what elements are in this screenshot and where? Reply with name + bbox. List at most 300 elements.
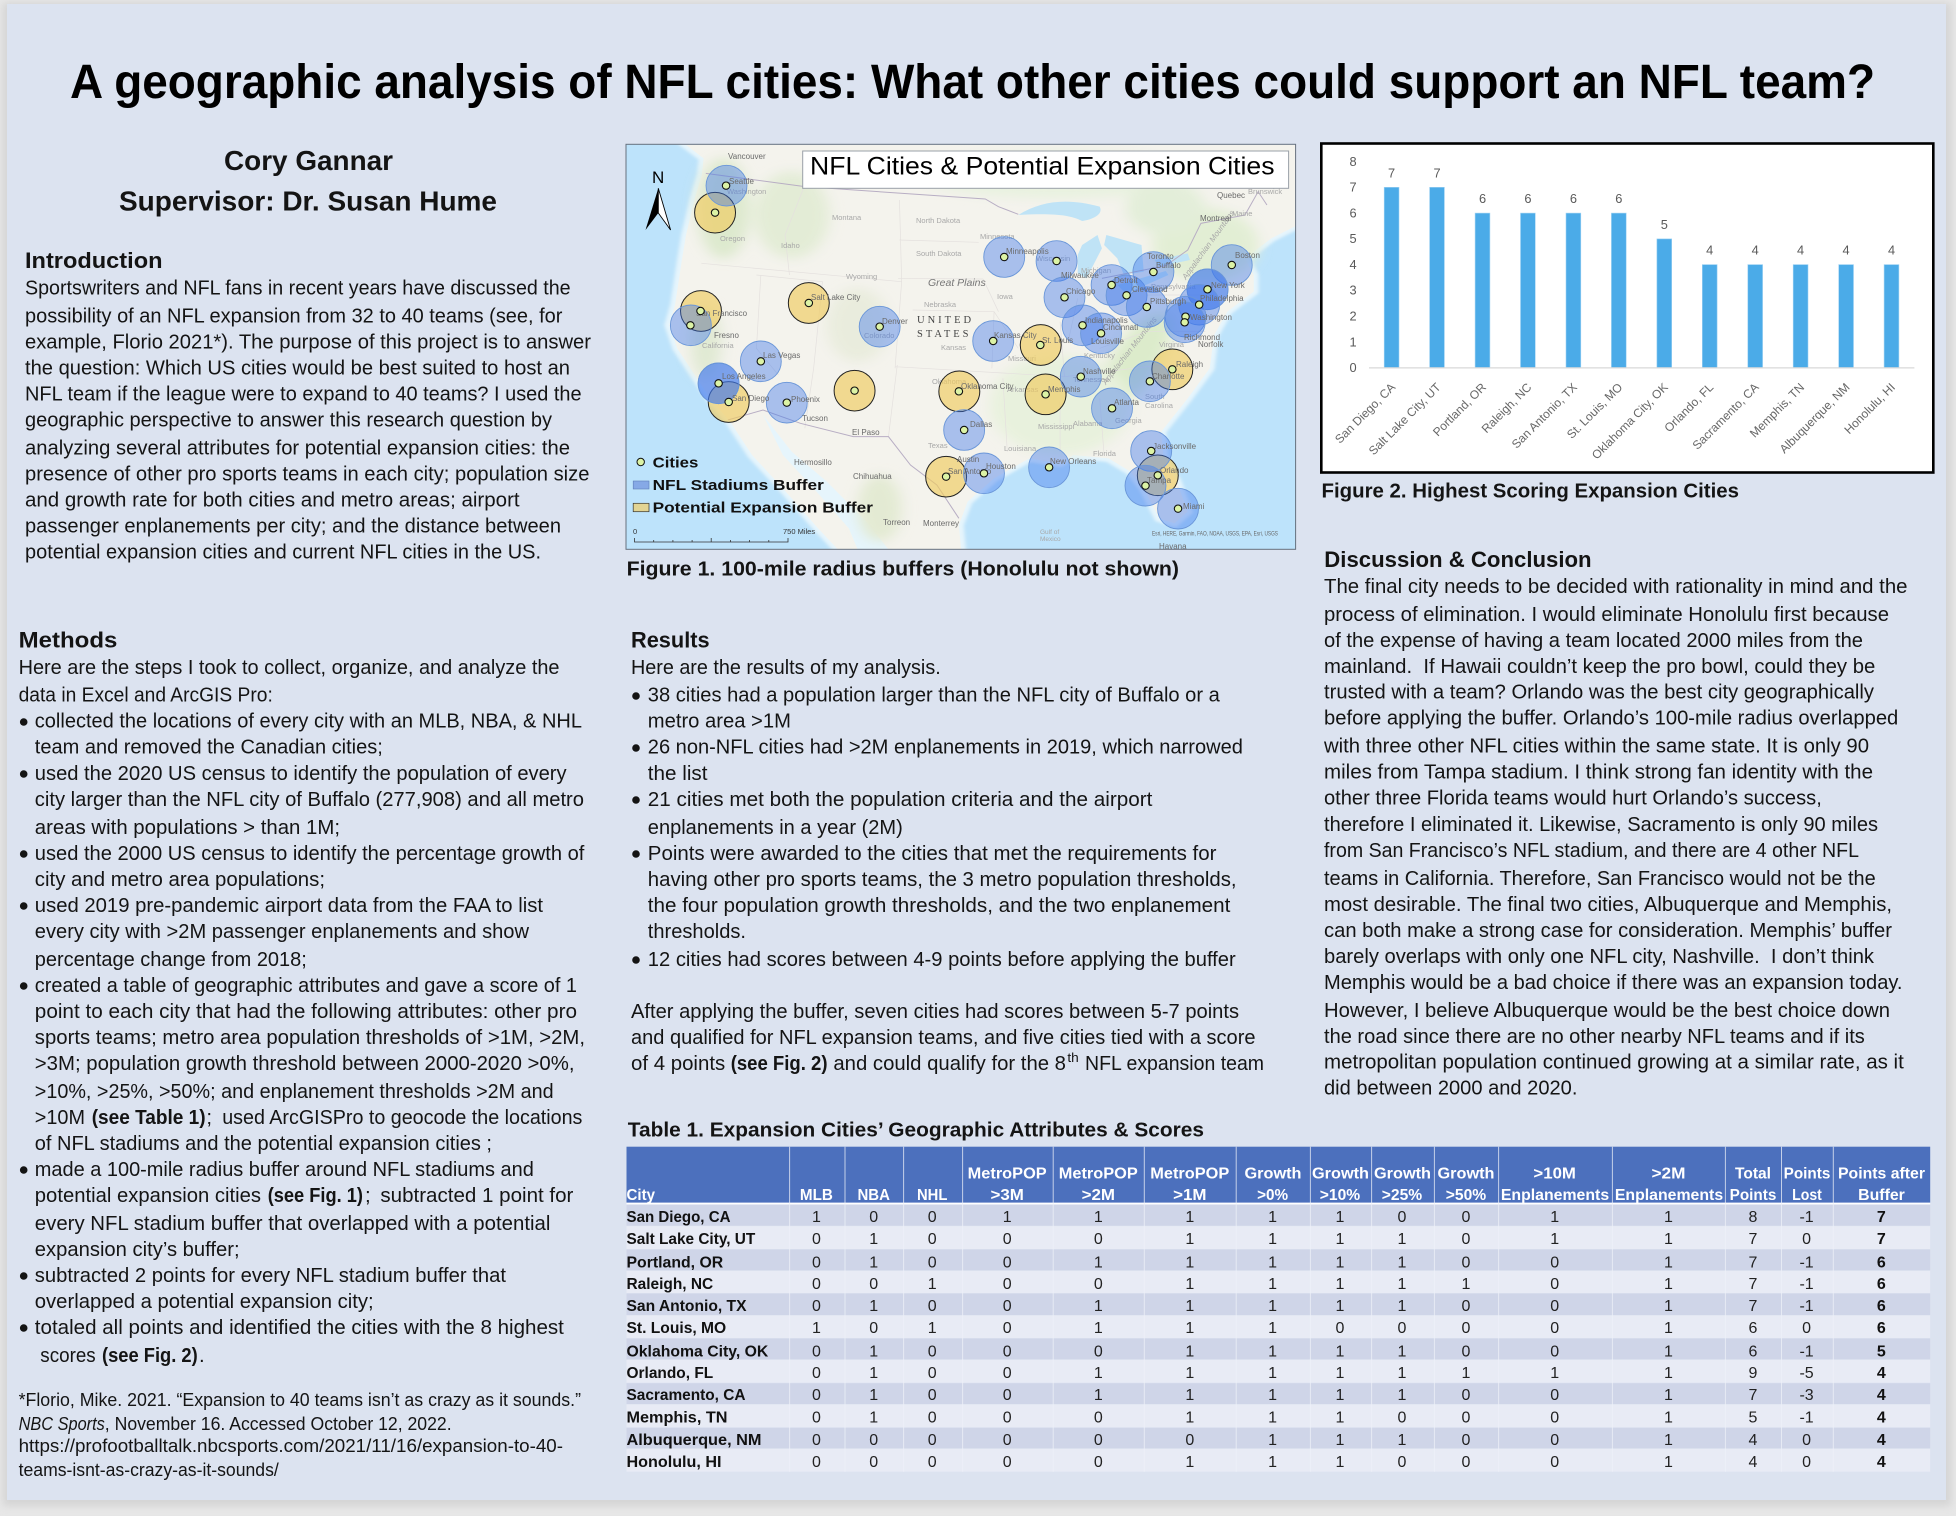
y axis labels: 1 bbox=[1349, 334, 1357, 349]
table city names: Raleigh, NC bbox=[626, 1276, 713, 1293]
city labels: Salt Lake City bbox=[811, 293, 860, 302]
table values: 1 bbox=[1268, 1410, 1277, 1427]
table values: 6 bbox=[1749, 1320, 1758, 1337]
y axis labels: 3 bbox=[1349, 283, 1357, 298]
heading: discussion and conclusion: Discussion & Conclusion bbox=[1324, 547, 1592, 572]
bar value labels: 6 bbox=[1570, 191, 1577, 206]
table values: 1 bbox=[1664, 1320, 1673, 1337]
table values: 1 bbox=[1398, 1254, 1407, 1271]
y axis labels: 4 bbox=[1349, 257, 1357, 272]
bullet list: methods steps: of NFL stadiums and the potential expansion cities ; bbox=[35, 1133, 492, 1155]
author and supervisor: Supervisor: Dr. Susan Hume bbox=[119, 186, 497, 216]
table values: 0 bbox=[1003, 1320, 1012, 1337]
table values: 6 bbox=[1877, 1320, 1886, 1337]
x axis city labels: Albuquerque, NM bbox=[1777, 380, 1853, 456]
text block: discussion body: mainland. If Hawaii couldn’t keep the pro bowl, could they be bbox=[1324, 656, 1875, 678]
table values: 0 bbox=[1398, 1209, 1407, 1226]
city labels: Oklahoma City bbox=[961, 382, 1013, 391]
table values: 1 bbox=[1268, 1454, 1277, 1471]
table values: 9 bbox=[1749, 1365, 1758, 1382]
map labels: states and regions: Appalachian Mountains bbox=[1100, 315, 1159, 387]
table values: 1 bbox=[1268, 1320, 1277, 1337]
text block: methods intro: Here are the steps I took to collect, organize, and analyze the bbox=[19, 657, 560, 679]
potential expansion buffers bbox=[681, 192, 1193, 497]
city labels: Tucson bbox=[802, 414, 828, 423]
table values: 1 bbox=[1185, 1231, 1194, 1248]
table values: 1 bbox=[1664, 1231, 1673, 1248]
map labels: states and regions: Oklahoma bbox=[932, 377, 967, 386]
bullet list: results: having other pro sports teams, the 3 metro population thresholds, bbox=[648, 869, 1237, 891]
text block: results conclusion: and qualified for NFL expansion teams, and five cities tied with a score bbox=[631, 1027, 1256, 1049]
map labels: states and regions: Iowa bbox=[997, 292, 1014, 301]
city labels: Cleveland bbox=[1132, 285, 1168, 294]
city labels: El Paso bbox=[852, 428, 880, 437]
table header: Lost bbox=[1792, 1187, 1822, 1204]
text block: results conclusion: NFL expansion team bbox=[1085, 1053, 1264, 1075]
table values: 1 bbox=[869, 1231, 878, 1248]
city labels: Raleigh bbox=[1176, 360, 1203, 369]
table city names: San Diego, CA bbox=[626, 1209, 730, 1226]
caption: figure 1: Figure 1. 100-mile radius buffers (Honolulu not shown) bbox=[627, 558, 1179, 581]
table values: 7 bbox=[1877, 1209, 1886, 1226]
table values: 0 bbox=[928, 1365, 937, 1382]
table values: 1 bbox=[1268, 1276, 1277, 1293]
text block: results conclusion: After applying the buffer, seven cities had scores between 5-7 points bbox=[631, 1001, 1239, 1023]
table values: 1 bbox=[1268, 1209, 1277, 1226]
table city names: Portland, OR bbox=[626, 1254, 723, 1271]
map labels: states and regions: Alabama bbox=[1073, 419, 1103, 428]
map labels: states and regions: Texas bbox=[928, 441, 948, 450]
table values: 1 bbox=[1398, 1387, 1407, 1404]
map labels: states and regions: Idaho bbox=[781, 241, 800, 250]
footnote: citation: *Florio, Mike. 2021. “Expansion to 40 teams isn’t as crazy as it sounds.” bbox=[19, 1390, 581, 1410]
table header: Growth bbox=[1374, 1165, 1431, 1182]
bullet list: results: enplanements in a year (2M) bbox=[648, 817, 903, 839]
table values: 0 bbox=[1003, 1254, 1012, 1271]
table values: 1 bbox=[928, 1320, 937, 1337]
bullet list: methods steps: overlapped a potential expansion city; bbox=[35, 1291, 374, 1313]
y axis labels: 8 bbox=[1349, 154, 1357, 169]
footnote: citation: teams-isnt-as-crazy-as-it-sounds/ bbox=[19, 1460, 280, 1480]
table header: >0% bbox=[1257, 1187, 1288, 1204]
table values: 1 bbox=[1185, 1343, 1194, 1360]
table values: 0 bbox=[1550, 1298, 1559, 1315]
x axis city labels: Honolulu, HI bbox=[1841, 380, 1898, 437]
city labels: Indianapolis bbox=[1085, 316, 1128, 325]
text block: introduction body: potential expansion cities and current NFL cities in the US. bbox=[25, 542, 541, 564]
text block: introduction body: Sportswriters and NFL fans in recent years have discussed the bbox=[25, 278, 571, 300]
map label: Great Plains and United States: STATES bbox=[917, 329, 972, 340]
table values: 0 bbox=[812, 1343, 821, 1360]
bullet list: methods steps: used ArcGISPro to geocode the locations bbox=[222, 1107, 582, 1129]
heading: methods: Methods bbox=[19, 628, 117, 653]
table values: 0 bbox=[1550, 1432, 1559, 1449]
table values: 0 bbox=[1398, 1320, 1407, 1337]
city labels: Hermosillo bbox=[794, 458, 832, 467]
bar value labels: 4 bbox=[1843, 243, 1850, 258]
bullet list: methods steps: collected the locations of every city with an MLB, NBA, & NHL bbox=[35, 711, 582, 733]
table values: -1 bbox=[1799, 1343, 1814, 1360]
text block: introduction body: presence of other pro sports teams in each city; population size bbox=[25, 464, 589, 486]
table values: 1 bbox=[1268, 1231, 1277, 1248]
table values: 0 bbox=[1550, 1343, 1559, 1360]
bullet list: methods steps: ; bbox=[206, 1107, 212, 1129]
map legend: Potential Expansion Buffer bbox=[653, 500, 873, 517]
bar value labels bbox=[1388, 165, 1895, 258]
text block: introduction body: geographic perspective to answer this research question by bbox=[25, 410, 553, 432]
table values: 0 bbox=[928, 1343, 937, 1360]
city labels: Kansas City bbox=[994, 331, 1037, 340]
bullet list: results: 26 non-NFL cities had >2M enplanements in 2019, which narrowed bbox=[648, 737, 1243, 759]
city labels: Vancouver bbox=[728, 152, 766, 161]
bullet list: results: the four population growth thresholds, and the two enplanement bbox=[648, 895, 1231, 917]
city labels: Richmond bbox=[1184, 333, 1220, 342]
bullet list: results: thresholds. bbox=[648, 921, 746, 943]
map labels: states and regions: Appalachian Mountains bbox=[1180, 209, 1237, 282]
city labels: Torreon bbox=[883, 518, 910, 527]
table values: 0 bbox=[812, 1387, 821, 1404]
table values: -1 bbox=[1799, 1276, 1814, 1293]
bar value labels: 4 bbox=[1752, 243, 1759, 258]
city labels: Chihuahua bbox=[853, 472, 892, 481]
table values: 0 bbox=[1550, 1410, 1559, 1427]
table values: 1 bbox=[869, 1410, 878, 1427]
table row backgrounds bbox=[626, 1204, 1930, 1472]
footnote: citation: https://profootballtalk.nbcsports.com/2021/11/16/expansion-to-40- bbox=[19, 1436, 563, 1456]
table values: 1 bbox=[1336, 1365, 1345, 1382]
map labels: states and regions: Wyoming bbox=[846, 272, 877, 281]
map labels: states and regions: South bbox=[1145, 392, 1165, 401]
bullet list: methods steps: expansion city’s buffer; bbox=[35, 1239, 240, 1261]
table values: 0 bbox=[869, 1209, 878, 1226]
table city names: San Antonio, TX bbox=[626, 1298, 747, 1315]
map labels: states and regions: Mexico bbox=[1040, 536, 1061, 543]
panel: methods bbox=[19, 628, 585, 1367]
table header: >3M bbox=[990, 1187, 1024, 1204]
table values: 0 bbox=[812, 1432, 821, 1449]
bullet list: results: Points were awarded to the cities that met the requirements for bbox=[648, 843, 1217, 865]
city labels: Austin bbox=[957, 455, 979, 464]
table values: 0 bbox=[1398, 1454, 1407, 1471]
city labels: Houston bbox=[986, 462, 1016, 471]
bullet list: methods steps: totaled all points and identified the cities with the 8 highest bbox=[35, 1317, 564, 1339]
text block: discussion body: did between 2000 and 2020. bbox=[1324, 1078, 1577, 1100]
table city names bbox=[626, 1209, 768, 1471]
bullet list: methods steps: subtracted 2 points for every NFL stadium buffer that bbox=[35, 1265, 506, 1287]
table values: 0 bbox=[1003, 1276, 1012, 1293]
table values: 1 bbox=[1398, 1298, 1407, 1315]
bar value labels: 4 bbox=[1888, 243, 1895, 258]
map labels: states and regions: Gulf of bbox=[1040, 529, 1059, 536]
table values: 0 bbox=[1461, 1343, 1470, 1360]
panel: introduction bbox=[25, 248, 591, 564]
bullet list: methods steps: city larger than the NFL city of Buffalo (277,908) and all metro bbox=[35, 789, 584, 811]
table values: 1 bbox=[1461, 1276, 1470, 1293]
text block: discussion body: The final city needs to be decided with rationality in mind and the bbox=[1324, 576, 1908, 598]
table header: MetroPOP bbox=[968, 1165, 1047, 1182]
table values: 7 bbox=[1749, 1254, 1758, 1271]
table values: 1 bbox=[1336, 1254, 1345, 1271]
map legend: NFL Stadiums Buffer bbox=[653, 477, 824, 494]
x axis city labels: San Diego, CA bbox=[1332, 380, 1398, 446]
table values: 0 bbox=[869, 1454, 878, 1471]
table values: 5 bbox=[1877, 1343, 1886, 1360]
table values: 7 bbox=[1749, 1387, 1758, 1404]
city labels: New York bbox=[1211, 281, 1246, 290]
table header: Points after bbox=[1838, 1165, 1925, 1182]
table values bbox=[812, 1209, 1886, 1471]
table values: 0 bbox=[812, 1410, 821, 1427]
x axis city labels bbox=[1332, 380, 1898, 462]
text block: discussion body: teams in California. Therefore, San Francisco would not be the bbox=[1324, 868, 1876, 890]
y axis labels: 2 bbox=[1349, 308, 1357, 324]
table values: 1 bbox=[1185, 1365, 1194, 1382]
bullet list: methods steps: . bbox=[199, 1345, 205, 1367]
text block: introduction body: example, Florio 2021*). The purpose of this project is to answer bbox=[25, 331, 591, 353]
map title box bbox=[803, 151, 1289, 188]
table city names: Albuquerque, NM bbox=[626, 1432, 762, 1449]
table values: 1 bbox=[1094, 1365, 1103, 1382]
table header: Buffer bbox=[1858, 1187, 1905, 1204]
table values: 1 bbox=[869, 1387, 878, 1404]
table values: 4 bbox=[1877, 1387, 1886, 1404]
table values: 1 bbox=[1094, 1387, 1103, 1404]
text block: discussion body: metropolitan population continued growing at a similar rate, as it bbox=[1324, 1052, 1904, 1074]
table values: 0 bbox=[812, 1276, 821, 1293]
table values: 1 bbox=[1336, 1209, 1345, 1226]
table values: 1 bbox=[1268, 1254, 1277, 1271]
table values: 0 bbox=[1398, 1410, 1407, 1427]
table values: 1 bbox=[1268, 1343, 1277, 1360]
table values: 1 bbox=[1336, 1276, 1345, 1293]
panel: results bbox=[631, 628, 1264, 1075]
table header: >10M bbox=[1533, 1165, 1576, 1182]
city labels: Fresno bbox=[714, 331, 739, 340]
city labels bbox=[696, 152, 1260, 551]
city labels: Dallas bbox=[970, 420, 992, 429]
table values: 0 bbox=[1802, 1454, 1811, 1471]
table values: -3 bbox=[1799, 1387, 1814, 1404]
table header: Points bbox=[1730, 1187, 1776, 1204]
table values: 1 bbox=[1268, 1432, 1277, 1449]
author and supervisor: Cory Gannar bbox=[224, 145, 393, 176]
city labels: Phoenix bbox=[791, 395, 820, 404]
table values: 0 bbox=[928, 1432, 937, 1449]
table values: 0 bbox=[928, 1454, 937, 1471]
table values: 0 bbox=[1550, 1320, 1559, 1337]
table header: >2M bbox=[1652, 1165, 1686, 1182]
text block: discussion body: miles from Tampa stadium. I think strong fan identity with the bbox=[1324, 762, 1873, 784]
map labels: states and regions: California bbox=[702, 341, 735, 350]
city labels: Memphis bbox=[1048, 385, 1080, 394]
bullet list: results: metro area >1M bbox=[648, 711, 791, 733]
y axis labels: 0 bbox=[1349, 360, 1357, 375]
table values: 0 bbox=[812, 1254, 821, 1271]
table values: 0 bbox=[1550, 1454, 1559, 1471]
text block: methods intro bbox=[19, 657, 560, 707]
map labels: states and regions: Virginia bbox=[1159, 340, 1185, 349]
table values: 1 bbox=[1268, 1387, 1277, 1404]
map labels: states and regions: Minnesota bbox=[980, 232, 1015, 241]
city labels: Philadelphia bbox=[1200, 294, 1244, 303]
city labels: Denver bbox=[882, 317, 908, 326]
text block: methods intro: data in Excel and ArcGIS Pro: bbox=[19, 685, 273, 707]
table values: 0 bbox=[812, 1231, 821, 1248]
table values: 0 bbox=[1094, 1432, 1103, 1449]
table values: 0 bbox=[869, 1276, 878, 1293]
bullet list: methods steps: scores bbox=[40, 1345, 96, 1367]
table values: 1 bbox=[1550, 1231, 1559, 1248]
icon: north arrow: N bbox=[652, 168, 664, 187]
bullet list: methods steps: >10M bbox=[35, 1107, 85, 1129]
table values: -1 bbox=[1799, 1298, 1814, 1315]
city labels: Buffalo bbox=[1156, 261, 1181, 270]
bullet list: methods steps: every NFL stadium buffer that overlapped with a potential bbox=[35, 1213, 550, 1235]
city labels: San Diego bbox=[732, 394, 770, 403]
city labels: Tampa bbox=[1147, 476, 1172, 485]
x axis city labels: Portland, OR bbox=[1430, 380, 1489, 439]
table values: 1 bbox=[1664, 1254, 1673, 1271]
city labels: Havana bbox=[1159, 542, 1187, 551]
table header: City bbox=[627, 1187, 655, 1204]
text block: results intro: Here are the results of my analysis. bbox=[631, 657, 941, 679]
NFL stadium buffers bbox=[670, 165, 1252, 529]
map labels: states and regions: Carolina bbox=[1145, 401, 1174, 410]
table values: 1 bbox=[1398, 1432, 1407, 1449]
map labels: states and regions: Pennsylvania bbox=[1151, 282, 1196, 291]
text block: discussion body: can both make a strong case for consideration. Memphis’ buffer bbox=[1324, 920, 1892, 942]
table header bbox=[626, 1147, 1930, 1204]
table values: 0 bbox=[1461, 1254, 1470, 1271]
table header: Total bbox=[1735, 1165, 1771, 1182]
table values: 0 bbox=[1003, 1432, 1012, 1449]
x axis city labels: Sacramento, CA bbox=[1690, 380, 1762, 452]
table values: 1 bbox=[1094, 1320, 1103, 1337]
text block: introduction body: NFL team if the league were to expand to 40 teams? I used the bbox=[25, 383, 582, 405]
table values: 0 bbox=[1094, 1454, 1103, 1471]
text block: results conclusion: of 4 points bbox=[631, 1053, 725, 1075]
bullet list: results: 21 cities met both the population criteria and the airport bbox=[648, 789, 1153, 811]
table header: Points bbox=[1784, 1165, 1830, 1182]
table values: 4 bbox=[1877, 1454, 1886, 1471]
y axis labels: 6 bbox=[1349, 205, 1357, 220]
table values: 4 bbox=[1749, 1432, 1758, 1449]
bar value labels: 4 bbox=[1797, 243, 1804, 258]
table header: Growth bbox=[1312, 1165, 1369, 1182]
table values: 1 bbox=[1185, 1454, 1194, 1471]
x axis city labels: Raleigh, NC bbox=[1479, 380, 1535, 436]
city labels: St. Louis bbox=[1042, 336, 1073, 345]
text block: results conclusion: (see Fig. 2) bbox=[731, 1053, 828, 1075]
text block: discussion body: most desirable. The final two cities, Albuquerque and Memphis, bbox=[1324, 894, 1892, 916]
map labels: states and regions: Tennessee bbox=[1073, 375, 1109, 384]
table values: 1 bbox=[812, 1209, 821, 1226]
table values: 0 bbox=[1003, 1365, 1012, 1382]
table values: 0 bbox=[928, 1410, 937, 1427]
table values: 1 bbox=[1336, 1298, 1345, 1315]
city labels: Detroit bbox=[1114, 276, 1138, 285]
table values: 0 bbox=[812, 1298, 821, 1315]
table city names: Oklahoma City, OK bbox=[626, 1343, 768, 1360]
map labels: states and regions: Washington bbox=[727, 187, 766, 196]
text block: introduction body bbox=[25, 278, 591, 564]
bullet list: methods steps: (see Fig. 2) bbox=[102, 1345, 198, 1367]
bar value labels: 7 bbox=[1388, 165, 1395, 180]
text block: introduction body: and growth rate for both cities and metro areas; airport bbox=[25, 490, 520, 512]
table: expansion cities scores bbox=[626, 1147, 1930, 1472]
table values: 0 bbox=[812, 1454, 821, 1471]
table header: Enplanements bbox=[1501, 1187, 1609, 1204]
table values: 0 bbox=[1550, 1387, 1559, 1404]
table values: 1 bbox=[1398, 1343, 1407, 1360]
bar value labels: 7 bbox=[1433, 165, 1441, 180]
table values: -1 bbox=[1799, 1410, 1814, 1427]
text block: discussion body: of the expense of having a team located 2000 miles from the bbox=[1324, 630, 1863, 652]
panel: figure 2 bar chart bbox=[1321, 144, 1933, 472]
bullet list: methods steps: used 2019 pre-pandemic airport data from the FAA to list bbox=[35, 895, 543, 917]
table values: 0 bbox=[1003, 1298, 1012, 1315]
bar value labels: 4 bbox=[1706, 243, 1713, 258]
caption: figure 2: Figure 2. Highest Scoring Expansion Cities bbox=[1322, 480, 1739, 503]
table values: 8 bbox=[1749, 1209, 1758, 1226]
x axis city labels: St. Louis, MO bbox=[1564, 380, 1625, 442]
table values: 0 bbox=[1550, 1276, 1559, 1293]
footnote: citation bbox=[19, 1390, 581, 1480]
table values: 0 bbox=[1550, 1254, 1559, 1271]
table values: 0 bbox=[1185, 1432, 1194, 1449]
map labels: states and regions: Louisiana bbox=[1004, 444, 1037, 453]
table values: 0 bbox=[1094, 1343, 1103, 1360]
table values: 4 bbox=[1877, 1365, 1886, 1382]
table values: 0 bbox=[928, 1298, 937, 1315]
table values: 0 bbox=[1461, 1387, 1470, 1404]
city labels: San Antonio bbox=[948, 467, 992, 476]
table header: >2M bbox=[1082, 1187, 1115, 1204]
map labels: states and regions: Mississippi bbox=[1038, 422, 1075, 431]
city labels: Montreal bbox=[1200, 214, 1231, 223]
city labels: Miami bbox=[1183, 502, 1205, 511]
table values: 0 bbox=[1461, 1231, 1470, 1248]
table values: 0 bbox=[1003, 1343, 1012, 1360]
map scale bar bbox=[633, 527, 815, 542]
table values: 7 bbox=[1877, 1231, 1886, 1248]
text block: discussion body: However, I believe Albuquerque would be the best choice down bbox=[1324, 1000, 1890, 1022]
table values: 0 bbox=[869, 1432, 878, 1449]
table values: 0 bbox=[1003, 1231, 1012, 1248]
text block: discussion body: with three other NFL cities within the same state. It is only 90 bbox=[1323, 736, 1869, 758]
bullet list: methods steps bbox=[20, 711, 585, 1367]
panel: discussion and conclusion bbox=[1323, 547, 1908, 1100]
panel: figure 1 map bbox=[626, 144, 1298, 551]
map title box: NFL Cities & Potential Expansion Cities bbox=[810, 152, 1274, 180]
bullet list: methods steps: >10%, >25%, >50%; and enplanement thresholds >2M and bbox=[35, 1081, 554, 1103]
bullet list: results: 12 cities had scores between 4-9 points before applying the buffer bbox=[648, 949, 1236, 971]
table values: 1 bbox=[869, 1365, 878, 1382]
table values: 1 bbox=[1664, 1209, 1673, 1226]
table values: 0 bbox=[928, 1231, 937, 1248]
bullet list: methods steps: (see Table 1) bbox=[92, 1107, 206, 1129]
city labels: Louisville bbox=[1091, 337, 1124, 346]
map labels: states and regions bbox=[702, 187, 1282, 543]
table values: 6 bbox=[1877, 1298, 1886, 1315]
table values: 7 bbox=[1749, 1298, 1758, 1315]
bar value labels: 6 bbox=[1615, 191, 1622, 206]
table header: MLB bbox=[800, 1187, 833, 1204]
table values: 1 bbox=[1185, 1298, 1194, 1315]
table values: 1 bbox=[1664, 1387, 1673, 1404]
table values: 7 bbox=[1749, 1231, 1758, 1248]
x axis city labels: Orlando, FL bbox=[1662, 380, 1716, 435]
